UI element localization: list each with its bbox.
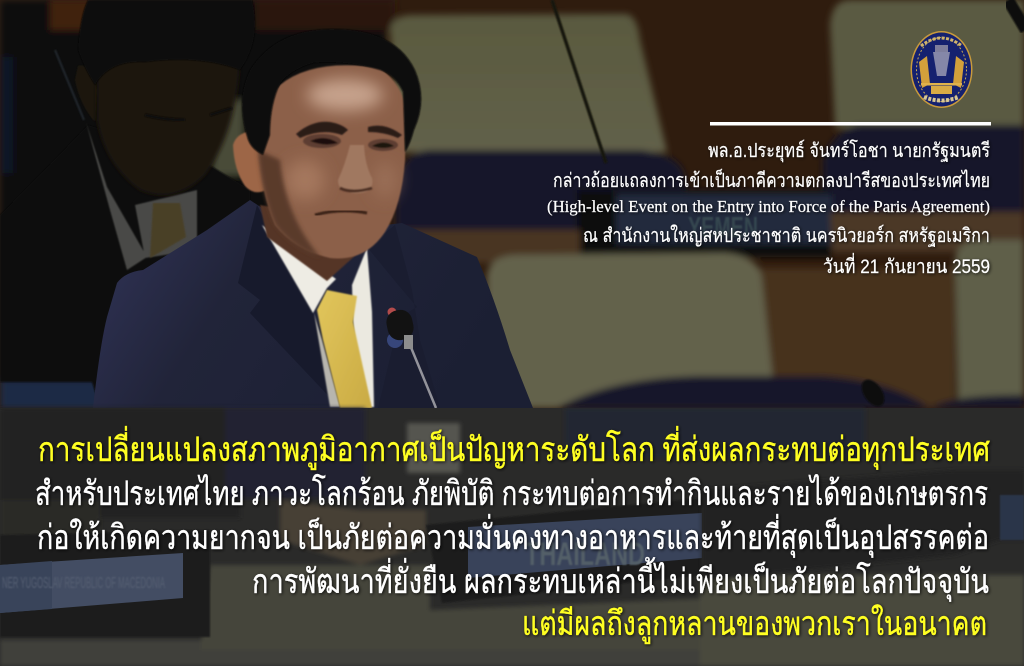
Thailand placard bbox=[426, 498, 702, 603]
microphone bbox=[384, 308, 436, 408]
eyes bbox=[303, 134, 398, 151]
suit bbox=[93, 200, 533, 408]
left placard bbox=[0, 530, 210, 637]
nose bbox=[338, 145, 372, 193]
left lapel bbox=[238, 205, 350, 408]
neck bbox=[260, 205, 372, 281]
ear bbox=[233, 131, 266, 192]
brows bbox=[296, 122, 402, 138]
face bbox=[97, 55, 240, 195]
dark text band bbox=[0, 408, 1024, 666]
government seal bbox=[910, 31, 972, 108]
YEMEN placard text: YEMEN bbox=[688, 212, 758, 244]
background man bbox=[0, 0, 255, 408]
event caption: วันที่ 21 กันยายน 2559 bbox=[823, 253, 990, 278]
main figure: prime minister bbox=[93, 29, 533, 408]
right dark box bbox=[702, 470, 1024, 580]
mic stands bbox=[55, 0, 1024, 410]
desk with placards under band: THAILAND bbox=[525, 536, 645, 572]
hair bbox=[242, 29, 421, 155]
tie bbox=[150, 203, 186, 258]
shirt bbox=[262, 225, 374, 407]
statement text bbox=[35, 426, 990, 644]
face bbox=[258, 65, 406, 258]
right lapel bbox=[367, 225, 440, 408]
header rule bbox=[710, 122, 991, 126]
desk with placards under band: NER YUGOSLAV REPUBLIC OF MACEDONIA bbox=[2, 575, 165, 592]
tie bbox=[317, 290, 372, 408]
shirt bbox=[86, 122, 197, 270]
event caption bbox=[547, 139, 990, 278]
ear bbox=[75, 66, 97, 122]
hair bbox=[78, 0, 255, 85]
mouth bbox=[315, 211, 367, 215]
desk with placards under band bbox=[0, 408, 1024, 666]
event caption: (High-level Event on the Entry into Force of the Paris Agreement) bbox=[547, 197, 990, 216]
lapel pins bbox=[387, 332, 403, 348]
facial features bbox=[145, 108, 232, 120]
